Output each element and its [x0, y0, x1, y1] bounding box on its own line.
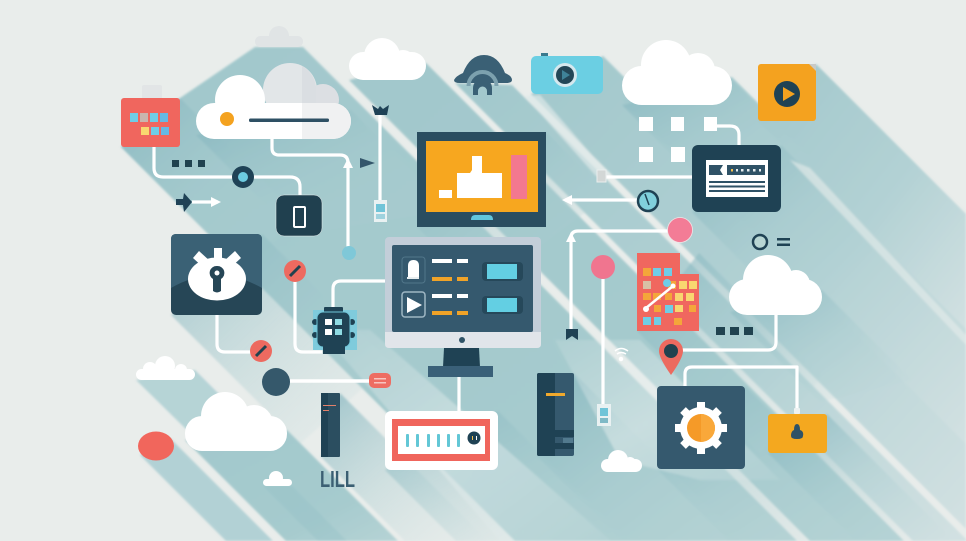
slim server [321, 393, 340, 457]
dark node [262, 368, 290, 396]
connector lines [154, 112, 797, 411]
icon: plane arrow [176, 193, 192, 212]
blue dot [342, 246, 356, 260]
large cloud lower left [185, 392, 287, 451]
clouds lower left [136, 356, 195, 380]
rows [432, 259, 468, 315]
cloud top [349, 38, 426, 80]
icon: camera [531, 53, 603, 94]
faint top cloud [255, 26, 303, 47]
icon: orange dot [220, 112, 234, 126]
big cloud [622, 40, 732, 105]
lower monitor [385, 237, 541, 377]
smartwatch chip [312, 307, 357, 354]
document tile [692, 145, 781, 212]
cloud with search bar [196, 63, 351, 139]
search bar line [249, 118, 329, 122]
building chart [637, 253, 699, 331]
small cloud right [601, 450, 642, 472]
clock [638, 191, 658, 211]
node [232, 166, 254, 188]
red no-sign 2 [250, 340, 272, 362]
red pill [369, 373, 391, 388]
pink node [668, 218, 692, 242]
router device [385, 411, 498, 470]
small phone 2 [597, 404, 611, 426]
red ellipse [138, 432, 174, 460]
arrowheads [211, 158, 576, 242]
thumbs up chart [457, 156, 502, 198]
small cloud bottom [263, 471, 292, 486]
icon: wifi [615, 348, 628, 360]
tall server [537, 373, 574, 456]
three squares [172, 160, 205, 167]
light stripes [320, 330, 611, 541]
play icon [402, 292, 425, 317]
small phone [374, 200, 387, 222]
server label: LILL [320, 466, 355, 492]
icon: arch [454, 55, 512, 95]
right cloud [729, 255, 822, 315]
icon: orange card play [758, 64, 816, 121]
triangle marker [360, 158, 375, 168]
crown icon [372, 105, 389, 115]
top monitor [417, 132, 546, 227]
icon: calendar [121, 85, 180, 147]
status icon [753, 235, 790, 249]
small grey box [597, 170, 606, 182]
phone tile [276, 195, 322, 236]
cyan buttons [482, 262, 523, 314]
icon: gem lock tile [171, 234, 262, 315]
gear tile [657, 386, 745, 469]
grid squares [639, 117, 717, 162]
map pin [659, 339, 683, 375]
pink node 2 [591, 255, 615, 279]
three squares right [716, 327, 753, 335]
red no-sign 1 [284, 260, 306, 282]
lock card [768, 408, 827, 453]
bell icon [402, 257, 425, 283]
small bookmark icon [566, 329, 578, 340]
